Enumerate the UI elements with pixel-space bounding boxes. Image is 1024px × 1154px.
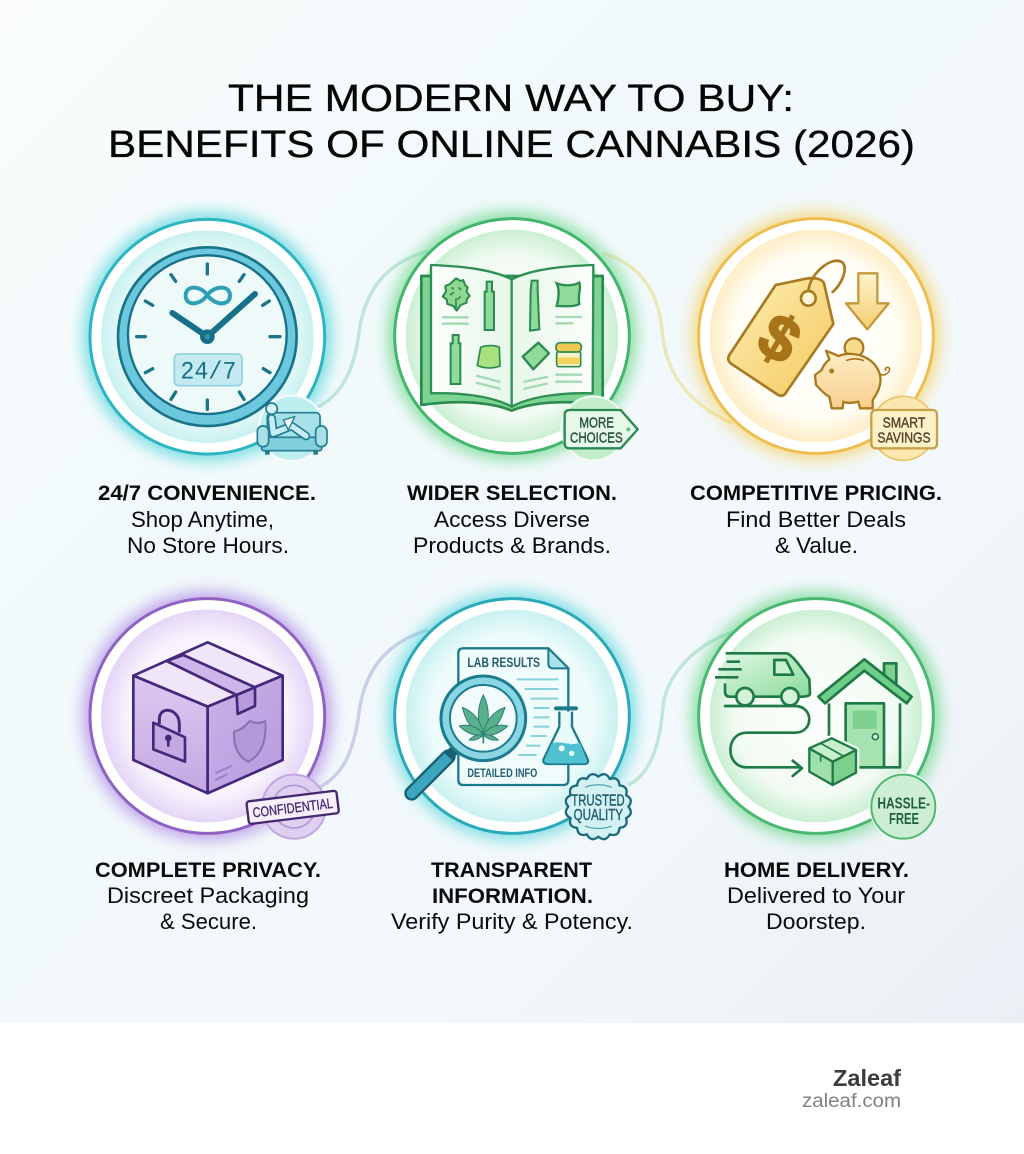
product: bud [443, 278, 470, 311]
caption: wider selection: Products & Brands. [413, 533, 611, 558]
caption: complete privacy: Discreet Packaging [107, 883, 309, 908]
product: gummy [477, 346, 500, 368]
badge: smart savings [871, 396, 937, 460]
icon: house [818, 659, 912, 767]
caption: home delivery: HOME DELIVERY. [724, 859, 909, 882]
icon: down arrow [846, 273, 889, 329]
caption: transparent information [391, 859, 633, 934]
connector: privacy to information [320, 630, 428, 787]
icon: open catalog book [421, 265, 603, 411]
caption: transparent information: TRANSPARENT [431, 859, 592, 882]
panel: transparent information [387, 591, 637, 841]
product: edible bar [523, 343, 549, 369]
panel: competitive pricing [691, 211, 941, 461]
caption: competitive pricing: & Value. [775, 533, 858, 558]
panel: home delivery [691, 591, 941, 841]
badge: smart savings: SMART [883, 415, 925, 431]
caption: wider selection [407, 482, 617, 558]
footer branding: zaleaf.com [802, 1091, 901, 1112]
icon: person on sofa [257, 396, 327, 461]
caption: home delivery: Delivered to Your [727, 883, 905, 908]
caption: transparent information: INFORMATION. [432, 885, 593, 908]
icon: shield [234, 721, 266, 762]
footer branding: Zaleaf [833, 1065, 901, 1091]
footer branding [802, 1065, 901, 1112]
caption: home delivery [724, 859, 909, 934]
title: BENEFITS OF ONLINE CANNABIS (2026) [108, 124, 915, 166]
connector: convenience to selection [318, 251, 428, 407]
icon: magnifying glass with leaf [412, 676, 526, 793]
caption: complete privacy: & Secure. [160, 909, 257, 934]
icon: sealed box [133, 642, 283, 793]
icon: price tag: $ [746, 300, 812, 378]
icon: lab report document: DETAILED INFO [467, 767, 537, 780]
icon: lab report document [458, 648, 568, 785]
icon: price tag [728, 261, 845, 396]
caption: wider selection: WIDER SELECTION. [407, 482, 617, 505]
panel: 24/7 convenience [83, 212, 332, 461]
badge: trusted quality seal: QUALITY [574, 807, 623, 824]
title [108, 78, 915, 166]
caption: competitive pricing: Find Better Deals [726, 507, 906, 532]
caption: 24/7 convenience: Shop Anytime, [131, 507, 274, 532]
caption: transparent information: Verify Purity & Potency. [391, 909, 633, 934]
caption: competitive pricing: COMPETITIVE PRICING. [690, 482, 942, 505]
connector: information to delivery [628, 630, 738, 785]
icon: lab report document: LAB RESULTS [467, 654, 540, 670]
badge: more choices [561, 396, 638, 460]
badge: more choices: CHOICES [570, 430, 623, 446]
caption: home delivery: Doorstep. [766, 909, 866, 934]
badge: smart savings: SAVINGS [877, 430, 931, 446]
badge: trusted quality seal [566, 774, 631, 839]
icon: flask [543, 708, 588, 764]
badge: trusted quality seal: TRUSTED [571, 792, 625, 809]
caption: complete privacy [95, 859, 321, 934]
product: vape pens [485, 282, 494, 330]
icon: piggy bank [815, 338, 890, 408]
caption: 24/7 convenience: No Store Hours. [127, 533, 289, 558]
panel: wider selection [387, 211, 638, 461]
caption: 24/7 convenience [98, 482, 316, 558]
icon: padlock [153, 710, 185, 762]
title: THE MODERN WAY TO BUY: [228, 78, 794, 120]
badge: hassle-free [871, 774, 936, 839]
caption: complete privacy: COMPLETE PRIVACY. [95, 859, 321, 882]
icon: cannabis leaf [459, 695, 508, 740]
badge: confidential stamp [246, 775, 339, 839]
panel: complete privacy [83, 591, 339, 841]
icon: clock: 24/7 [180, 359, 236, 387]
badge: confidential stamp: CONFIDENTIAL [252, 795, 334, 821]
caption: wider selection: Access Diverse [434, 507, 590, 532]
icon: clock [117, 246, 298, 427]
caption: 24/7 convenience: 24/7 CONVENIENCE. [98, 482, 316, 505]
badge: hassle-free: HASSLE- [877, 796, 930, 813]
badge: more choices: MORE [579, 415, 614, 431]
icon: parcel [809, 738, 856, 785]
badge: hassle-free: FREE [889, 811, 919, 828]
connector: selection to pricing [603, 253, 732, 423]
product: jar [557, 352, 581, 367]
caption: competitive pricing [690, 482, 942, 558]
icon: delivery van and route [715, 653, 810, 776]
product: concentrate [557, 283, 580, 306]
